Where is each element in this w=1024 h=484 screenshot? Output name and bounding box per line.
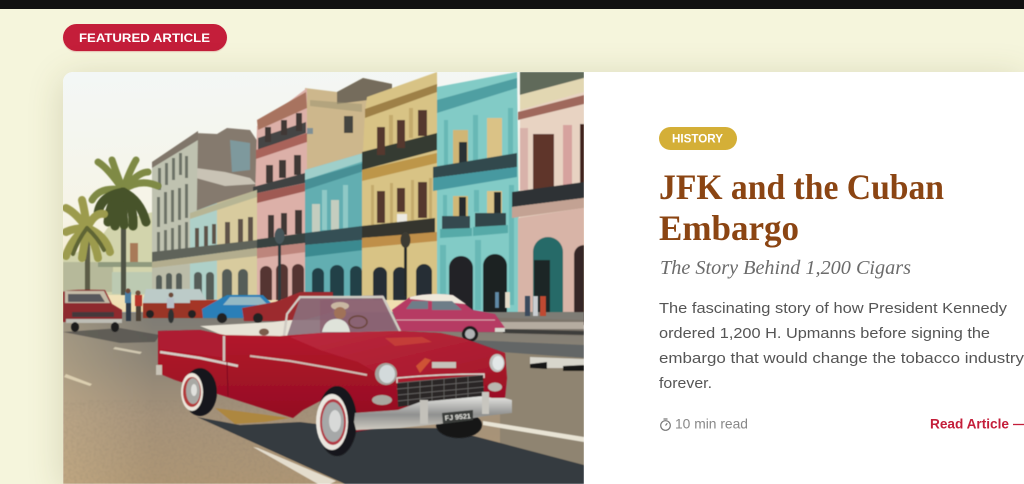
far left pale buildings [63, 212, 153, 295]
photo: classic red car on a colourful Havana street [63, 72, 584, 484]
rear light [156, 365, 162, 375]
category pill: history [659, 127, 737, 150]
beige tall building [305, 78, 392, 190]
red car behind [143, 289, 220, 318]
article title: JFK and the Cuban [659, 167, 944, 207]
front wheel [316, 386, 357, 456]
yellow building [362, 72, 438, 300]
rear wheel [181, 368, 217, 416]
windshield [284, 295, 400, 336]
hood [290, 331, 505, 382]
grey weathered building [152, 128, 258, 275]
category pill: history: HISTORY [672, 134, 723, 146]
panel: article content [659, 127, 1024, 432]
car body [158, 330, 507, 432]
license plate: FJ 9521 [445, 413, 471, 422]
read article link: Read Article [930, 416, 1009, 432]
main red convertible car [156, 295, 512, 456]
article description: The fascinating story of how President Kennedy [659, 300, 1008, 317]
red car right [242, 292, 333, 323]
pink car [392, 294, 505, 342]
background cars and people [63, 288, 546, 342]
license plate [442, 410, 473, 424]
blue car [202, 295, 274, 323]
article description: forever. [659, 375, 712, 392]
far front wheel [436, 412, 482, 438]
sky [63, 72, 584, 312]
side mirror [259, 328, 269, 336]
buildings [63, 72, 584, 325]
article description: ordered 1,200 H. Upmanns before signing the [659, 325, 990, 342]
palm trees [66, 160, 158, 295]
chrome side strips [160, 352, 238, 366]
panel: featured article card [63, 72, 1024, 484]
people [125, 288, 546, 323]
top black bar [0, 0, 1024, 9]
icon: stopwatch [661, 419, 670, 430]
read time: 10 min read [675, 416, 748, 432]
pink and cream building right [512, 72, 584, 325]
grille [397, 362, 484, 407]
teal building left [305, 152, 367, 300]
badge: featured article: FEATURED ARTICLE [79, 31, 210, 45]
article description [659, 300, 1024, 392]
article subtitle: The Story Behind 1,200 Cigars [660, 257, 911, 279]
article title: Embargo [659, 208, 799, 248]
pale teal and cream low buildings [152, 190, 257, 300]
chrome bumper [354, 396, 512, 430]
street lamp posts [274, 228, 410, 302]
headlights [372, 354, 504, 405]
article description: embargo that would change the tobacco industry [659, 350, 1024, 367]
badge: featured article [63, 24, 227, 51]
road [63, 310, 584, 484]
car seats [200, 320, 327, 337]
article title [659, 167, 944, 248]
far left red car [63, 290, 122, 332]
teal building right [433, 72, 520, 318]
pink building [252, 88, 307, 300]
